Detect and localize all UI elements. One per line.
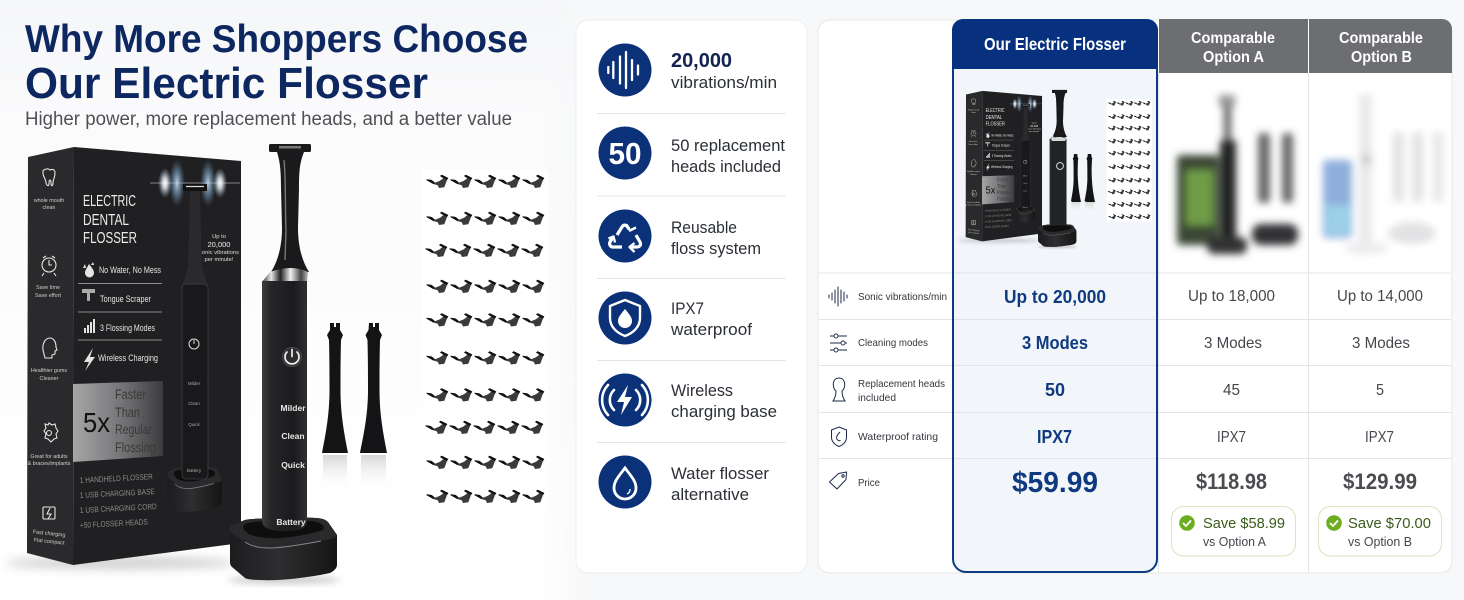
product thumbnail [958,90,1152,248]
product box: Save time [36,285,60,291]
box sonic callout [199,234,239,263]
text [671,218,761,258]
option B values: IPX7 [1365,429,1394,446]
5x faster panel: Faster [115,386,146,402]
icon: shield drop [598,292,652,344]
row icon: replacement head [833,378,845,401]
column header: comparable option B: Option B [1351,49,1412,66]
column header: comparable option B: Comparable [1339,30,1423,47]
column: our electric flosser [952,19,1158,572]
our values [1004,287,1106,499]
text: IPX7 [671,299,704,318]
column header [952,19,1158,69]
option A values: Up to 18,000 [1188,288,1275,305]
product box: & braces/implants [28,461,71,467]
title: Why More Shoppers Choose [25,18,528,61]
icon: wireless bolt [598,374,652,426]
icon: water drop [598,456,652,508]
column header: Our Electric Flosser [984,34,1126,54]
box side icons and captions [42,169,58,519]
feature: waterproof [598,292,752,344]
text [670,299,752,339]
text [671,381,777,421]
text: waterproof [670,320,752,339]
option B values: Up to 14,000 [1337,288,1423,305]
option A values: IPX7 [1217,429,1246,446]
text [671,50,777,92]
box heading: FLOSSER [83,230,137,247]
option A values [1188,288,1275,494]
flosser on box: Clean [188,401,200,406]
our values: $59.99 [1012,467,1098,499]
title [25,18,528,108]
savings badge: option B: Save $70.00 [1348,515,1431,532]
text: charging base [671,402,777,421]
box feature list: Tongue Scraper [100,294,151,304]
box sonic callout: per minute! [204,257,234,263]
flosser on box [167,184,222,512]
row labels: included [858,392,896,404]
text [671,136,785,176]
box contents list: 1 USB CHARGING CORD [80,502,157,515]
panel: comparison table [818,19,1452,573]
text: Water flosser [671,464,769,483]
column header: comparable option A [1159,19,1308,73]
main flosser handle [262,144,311,531]
icon: check [1326,515,1342,531]
product box: Save effort [35,293,61,299]
box feature list: Wireless Charging [98,353,158,363]
text: vibrations/min [671,73,777,92]
savings badge: option B [1318,506,1442,556]
icon: sound wave [598,44,652,96]
box sonic callout: sonic vibrations [199,250,239,256]
thumbnail replacement heads [1072,154,1095,202]
option B values: 5 [1376,382,1384,399]
savings badge: option A [1172,506,1296,556]
product box: Flat compact [33,537,65,547]
feature: wireless charging [598,374,777,426]
row labels [858,291,947,489]
feature: reusable [598,210,761,262]
box shadow [5,557,235,569]
savings badge: option B: vs Option B [1348,535,1412,549]
box sonic callout: Up to [212,234,226,240]
option B values: $129.99 [1343,469,1417,494]
blurred competitor B product [1323,94,1443,254]
row icon: cleaning modes [830,334,847,352]
icon: check [1179,515,1195,531]
text: heads included [671,157,781,176]
our values: 50 [1045,380,1065,400]
flosser on box: Battery [187,468,202,473]
savings badge: option A: vs Option A [1203,535,1267,549]
thumbnail handle [1038,90,1076,247]
replacement head right [360,323,387,491]
box feature list: 3 Flossing Modes [100,323,155,333]
5x faster panel: Than [115,404,140,420]
our values: IPX7 [1037,427,1072,447]
feature: vibrations [598,44,777,96]
product box [27,147,241,565]
flosser on box: Milder [188,381,201,386]
box heading: DENTAL [83,212,129,229]
text: 20,000 [671,50,732,72]
box contents list: +50 FLOSSER HEADS [80,517,148,530]
box sonic callout: 20,000 [208,240,230,249]
replacement head left [322,323,348,491]
row labels: Waterproof rating [858,431,938,443]
box feature list: No Water, No Mess [99,265,161,275]
text: alternative [671,485,749,504]
charging dock [228,518,340,584]
mode labels: Quick [281,460,305,470]
subtitle: Higher power, more replacement heads, and a better value [25,109,512,130]
5x faster panel [73,381,163,462]
box feature list [78,262,162,371]
feature: replacement heads [598,126,785,180]
box contents list: 1 USB CHARGING BASE [80,487,155,500]
mode labels: Battery [276,517,306,527]
mode labels [276,403,306,527]
option B values [1337,288,1423,494]
power button [282,348,302,366]
box heading [83,193,137,247]
blurred competitor A product [1177,95,1298,254]
our values: 3 Modes [1022,333,1088,353]
row labels: Sonic vibrations/min [858,291,947,303]
row labels: Replacement heads [858,378,945,390]
flosser on box: Quick [188,422,200,427]
mode labels: Milder [280,403,306,413]
box contents list: 1 HANDHELD FLOSSER [80,472,153,485]
text: Wireless [671,381,733,400]
box contents list [80,472,157,530]
product box: Fast charging [33,529,66,539]
column header: comparable option B [1309,19,1452,73]
row icon: waterproof shield [832,427,846,446]
title: Our Electric Flosser [25,59,428,108]
icon: recycle [598,210,652,262]
option A values: $118.98 [1196,469,1267,494]
text: 50 replacement [671,136,785,155]
box glow [150,159,240,207]
option A values: 3 Modes [1204,335,1262,352]
box heading: ELECTRIC [83,193,136,210]
product box: Healthier gums [31,368,67,374]
savings badge: option A: Save $58.99 [1203,515,1285,532]
mode labels: Clean [281,431,305,441]
column header: comparable option A: Option A [1203,49,1264,66]
row labels: Cleaning modes [858,337,928,349]
5x faster panel: Regular [115,421,152,437]
product box: whole mouth [33,198,64,204]
row icon: price tag [830,472,846,489]
column header: comparable option A: Comparable [1191,30,1275,47]
50 replacement flosser clips [422,170,548,510]
text [671,464,769,504]
product box: Cleaner [40,376,59,382]
icon: 50 badge: 50 [608,136,642,171]
our values: Up to 20,000 [1004,287,1106,307]
product group: flosser kit [5,144,548,584]
product box: Great for adults [30,454,68,460]
icon: 50 badge [598,126,652,180]
text: floss system [671,239,761,258]
option A values: 45 [1223,382,1240,399]
text: Reusable [671,218,737,237]
5x faster panel: Flossing [115,439,156,455]
product box: clean [43,205,55,211]
option B values: 3 Modes [1352,335,1410,352]
5x faster panel: 5x [83,407,110,438]
row labels: Price [858,477,880,489]
panel: features [576,20,807,573]
row icon: sonic vibrations [829,287,847,306]
feature: water flosser alternative [598,456,769,508]
